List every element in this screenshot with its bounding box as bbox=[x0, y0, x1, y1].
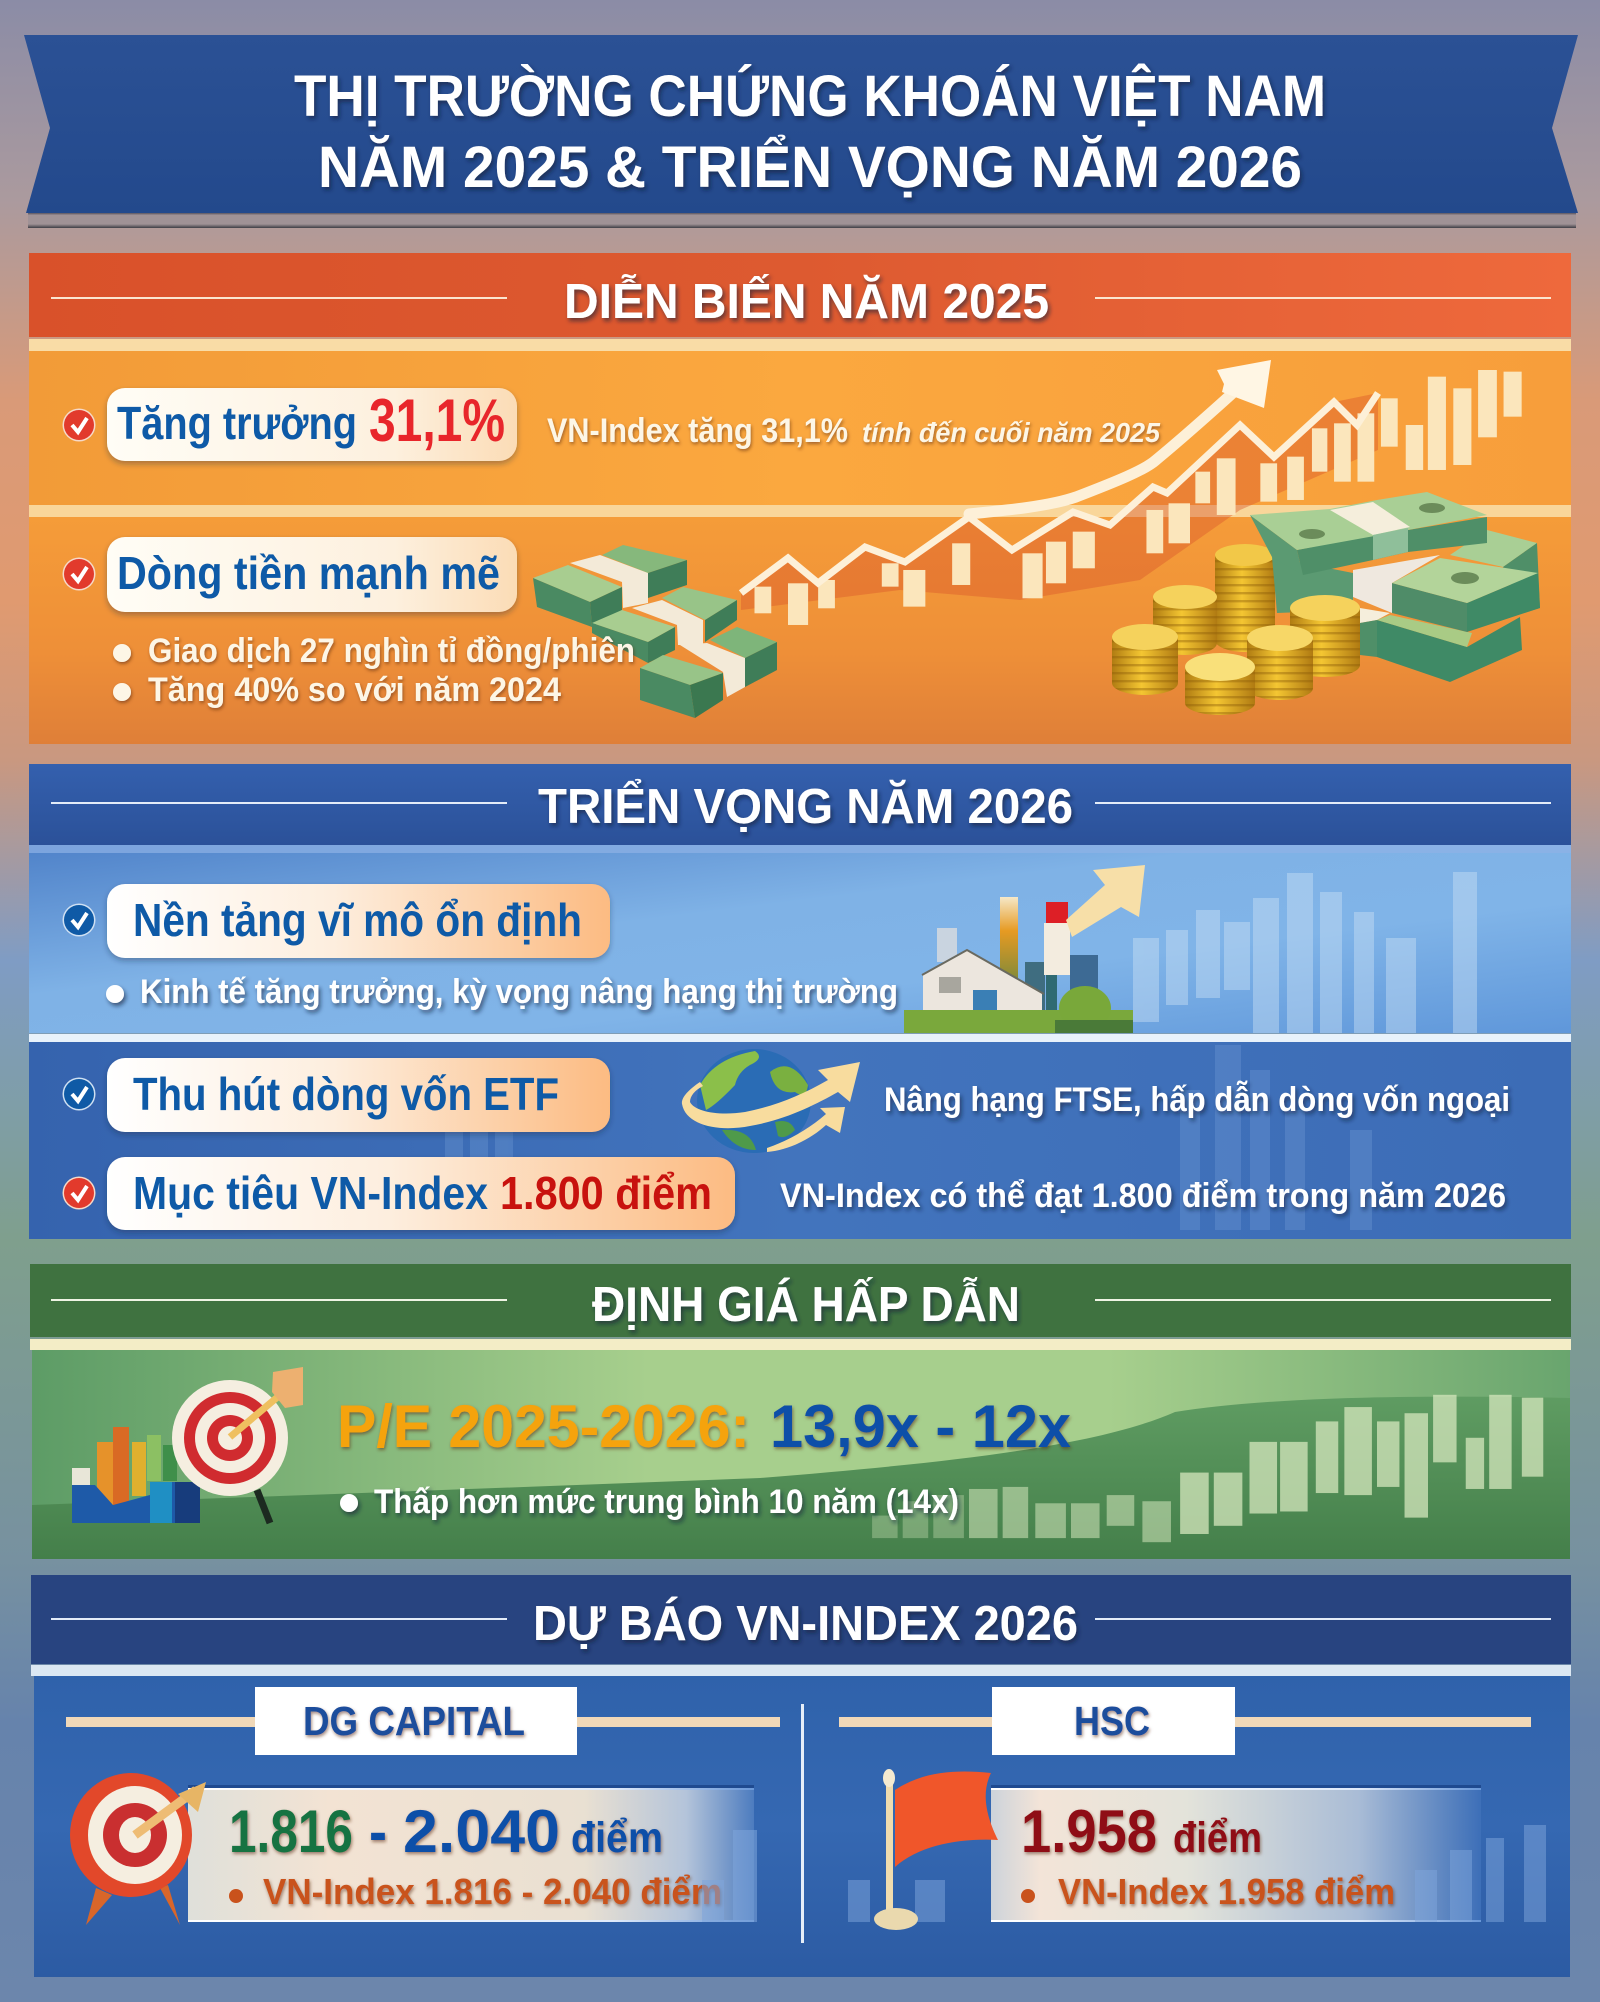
card: DG Capital forecast bbox=[188, 1785, 754, 1922]
title banner bbox=[24, 35, 1578, 228]
icon: check Dòng tiền bbox=[62, 558, 96, 590]
icon: globe with arrows bbox=[682, 1049, 860, 1153]
icon: target bbox=[70, 1773, 206, 1925]
card: DG Capital forecast: điểm bbox=[571, 1814, 663, 1862]
icon: coin stacks front bbox=[1112, 595, 1360, 715]
heading: triển vọng năm 2026 bbox=[29, 764, 1571, 845]
label: HSC bbox=[839, 1687, 1531, 1755]
heading: dự báo vn-index 2026: DỰ BÁO VN-INDEX 2026 bbox=[533, 1597, 1078, 1651]
panel: diễn biến năm 2025 bbox=[29, 253, 1571, 744]
card: HSC forecast: điểm bbox=[1173, 1814, 1262, 1862]
card: DG Capital forecast: 1.816 bbox=[229, 1798, 353, 1865]
icon: check Tăng trưởng bbox=[62, 408, 96, 442]
pill: Nền tảng vĩ mô ổn định: Nền tảng vĩ mô ổn định bbox=[133, 894, 582, 946]
chart: faded bars left bbox=[702, 1830, 757, 1922]
heading: diễn biến năm 2025 bbox=[29, 253, 1571, 337]
panel: định giá hấp dẫn bbox=[30, 1264, 1571, 1559]
title text: THỊ TRƯỜNG CHỨNG KHOÁN VIỆT NAM bbox=[294, 64, 1326, 129]
pill: Mục tiêu VN-Index 1.800 điểm bbox=[107, 1157, 735, 1230]
label: DG CAPITAL: DG CAPITAL bbox=[303, 1698, 525, 1744]
text: Nâng hạng FTSE: Nâng hạng FTSE, hấp dẫn dòng vốn ngoại bbox=[884, 1081, 1510, 1119]
pill: Thu hút dòng vốn ETF: Thu hút dòng vốn ETF bbox=[133, 1068, 559, 1120]
bullet: kinh tế tăng trưởng: Kinh tế tăng trưởng, kỳ vọng nâng hạng thị trường bbox=[140, 973, 898, 1011]
label: HSC: HSC bbox=[1074, 1698, 1150, 1744]
card: HSC forecast bbox=[991, 1785, 1481, 1922]
text: VN-Index tăng 31,1% bbox=[547, 412, 1160, 450]
text: P/E 2025-2026: 13,9x - 12x bbox=[770, 1393, 1071, 1460]
pill: Dòng tiền mạnh mẽ bbox=[107, 537, 517, 612]
card: HSC forecast: VN-Index 1.958 điểm bbox=[1058, 1871, 1395, 1912]
heading: triển vọng năm 2026: TRIỂN VỌNG NĂM 2026 bbox=[538, 779, 1073, 834]
icon: check Mục tiêu bbox=[62, 1176, 96, 1210]
card: HSC forecast: 1.958 bbox=[1021, 1798, 1157, 1865]
icon: money bundles left bbox=[533, 545, 777, 718]
card: DG Capital forecast: 2.040 bbox=[403, 1798, 560, 1865]
heading: định giá hấp dẫn: ĐỊNH GIÁ HẤP DẪN bbox=[592, 1278, 1020, 1332]
chart: faded bars right bbox=[848, 1825, 1546, 1922]
icon: check Nền tảng bbox=[62, 904, 96, 936]
pill: Tăng trưởng 31,1%: 31,1% bbox=[369, 387, 505, 454]
text: VN-Index có thể đạt: VN-Index có thể đạt 1.800 điểm trong năm 2026 bbox=[780, 1177, 1506, 1215]
icon: house with rising bars and arrow bbox=[904, 865, 1145, 1033]
text: P/E 2025-2026 bbox=[337, 1393, 1071, 1460]
text: VN-Index tăng 31,1%: VN-Index tăng 31,1% bbox=[547, 412, 848, 450]
pill: Nền tảng vĩ mô ổn định bbox=[107, 884, 610, 958]
icon: money stack right bbox=[1250, 492, 1540, 682]
icon: bar chart with target bbox=[72, 1367, 303, 1523]
card: DG Capital forecast: - bbox=[369, 1798, 387, 1865]
bullets: giao dịch bbox=[113, 632, 635, 709]
pill: Dòng tiền mạnh mẽ: Dòng tiền mạnh mẽ bbox=[117, 547, 500, 599]
bullets: giao dịch: Tăng 40% so với năm 2024 bbox=[148, 671, 561, 709]
heading: dự báo vn-index 2026 bbox=[31, 1575, 1571, 1664]
bullet: thấp hơn mức trung bình: Thấp hơn mức trung bình 10 năm (14x) bbox=[374, 1483, 959, 1521]
icon: check ETF bbox=[62, 1078, 96, 1110]
chart: faded bars bbox=[1133, 872, 1477, 1033]
icon: flag bbox=[874, 1769, 998, 1930]
pill: Mục tiêu VN-Index 1.800 điểm: 1.800 điểm bbox=[500, 1167, 712, 1219]
bullets: giao dịch: Giao dịch 27 nghìn tỉ đồng/phiên bbox=[148, 632, 635, 670]
chart: pale bars bbox=[872, 1395, 1543, 1542]
pill: Mục tiêu VN-Index 1.800 điểm: Mục tiêu VN-Index bbox=[133, 1167, 488, 1219]
panel: dự báo vn-index 2026 bbox=[31, 1575, 1571, 1977]
pill: Tăng trưởng 31,1%: Tăng trưởng bbox=[117, 397, 357, 449]
text: VN-Index tăng 31,1%: tính đến cuối năm 2025 bbox=[862, 417, 1160, 448]
pill: Thu hút dòng vốn ETF bbox=[107, 1058, 610, 1132]
chart: rising candlestick bars and arrow bbox=[741, 360, 1522, 625]
card: DG Capital forecast: VN-Index 1.816 - 2.040 điểm bbox=[263, 1871, 722, 1912]
title text bbox=[294, 64, 1326, 200]
pill: Tăng trưởng 31,1% bbox=[107, 387, 517, 461]
heading: diễn biến năm 2025: DIỄN BIẾN NĂM 2025 bbox=[564, 275, 1049, 329]
icon: coin stacks bbox=[1153, 544, 1275, 655]
title text: NĂM 2025 & TRIỂN VỌNG NĂM 2026 bbox=[318, 135, 1302, 200]
heading: định giá hấp dẫn bbox=[30, 1264, 1571, 1337]
text: P/E 2025-2026: P/E 2025-2026: bbox=[337, 1393, 750, 1460]
chart: faded bars behind ETF row bbox=[445, 1045, 1372, 1230]
label: DG CAPITAL bbox=[66, 1687, 780, 1755]
panel: triển vọng năm 2026 bbox=[29, 764, 1571, 1239]
